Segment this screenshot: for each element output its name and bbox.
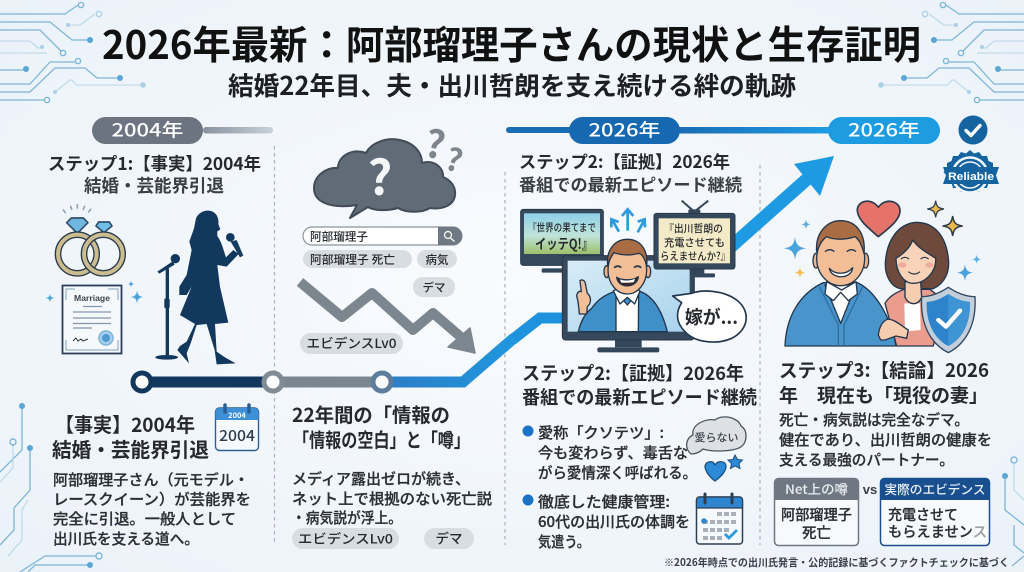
title: 2026年最新：阿部瑠理子さんの現状と生存証明 <box>102 15 921 71</box>
section 1 body: レースクイーン）が芸能界を <box>53 488 251 510</box>
comparison box: evidence: もらえませンス <box>888 521 987 542</box>
icon: check circle <box>958 116 988 144</box>
icon: question cloud: ? <box>421 113 450 170</box>
section 4 body <box>779 409 992 470</box>
comparison box: rumor <box>774 478 858 546</box>
search bar <box>303 227 462 245</box>
chip: 阿部瑠理子 死亡: 阿部瑠理子 死亡 <box>310 252 395 268</box>
step 2 heading top: ステップ2:【証拠】2026年 <box>519 148 730 173</box>
icon: 2004 calendar <box>216 405 258 450</box>
woman <box>885 222 949 346</box>
section 1 heading <box>52 409 209 463</box>
icon: question cloud <box>314 113 468 218</box>
TV right caption: らえませんか?』 <box>660 248 730 264</box>
bullet: health care <box>522 491 690 552</box>
woman hand <box>878 319 908 340</box>
shield <box>921 287 975 353</box>
section 4 heading <box>779 356 989 408</box>
chip: デマ: デマ <box>422 280 446 296</box>
TV right <box>654 201 735 277</box>
chip: エビデンスLv0 lower: エビデンスLv0 <box>298 528 393 548</box>
arrows above presenter <box>611 209 645 232</box>
comparison box: evidence: 充電させて <box>888 504 958 525</box>
TV left caption: イッテQ!』 <box>535 234 593 254</box>
chip: 病気: 病気 <box>426 252 449 268</box>
section 4 body: 健在であり、出川哲朗の健康を <box>779 429 992 450</box>
icon: question cloud: ? <box>441 134 468 181</box>
speech bubble <box>673 291 746 342</box>
icon: Reliable badge <box>943 150 999 194</box>
chip: デマ lower <box>424 528 474 549</box>
circuit decoration: bottom right <box>1002 457 1024 566</box>
section 1 body: 出川氏を支える道へ。 <box>53 528 199 549</box>
sparkles near certificate <box>46 280 144 304</box>
chip: デマ <box>413 277 455 297</box>
rising blue trend arrow <box>512 156 834 340</box>
step 2 heading top: 番組での最新エピソード継続 <box>519 171 742 196</box>
man <box>785 221 896 346</box>
step 2 heading top <box>519 148 742 196</box>
section 1 heading: 【事実】2004年 <box>55 409 195 438</box>
step 1 heading <box>48 151 261 198</box>
section dividers <box>274 146 760 545</box>
circuit decoration: top right <box>878 2 1024 103</box>
section 1 body: 完全に引退。一般人として <box>53 508 236 529</box>
timeline header: 2004 pill <box>92 116 273 144</box>
comparison box: evidence <box>880 478 990 546</box>
section 3 heading: ステップ2:【証拠】2026年 <box>522 360 744 386</box>
icon: singer silhouette <box>155 211 243 364</box>
TV right caption: 充電させても <box>664 235 725 250</box>
circuit decoration: top left <box>0 2 146 103</box>
icon: question cloud: ? <box>368 139 392 209</box>
icon: 2004 calendar: 2004 <box>219 425 255 446</box>
timeline header: 2026 light pill <box>828 116 940 144</box>
step 1 heading: 結婚・芸能界引退 <box>84 173 224 198</box>
icon: 愛らない bubble with heart and star <box>687 417 746 481</box>
bullet: health care: 気遣う。 <box>538 531 590 552</box>
timeline header: 2026 light pill: 2026年 <box>848 116 920 142</box>
section 3 heading <box>522 360 757 410</box>
subtitle: 結婚22年目、夫・出川哲朗を支え続ける絆の軌跡 <box>228 66 796 103</box>
comparison box: evidence: 実際のエビデンス <box>884 479 986 498</box>
section 2 heading: 「情報の空白」と「噂」 <box>293 424 470 453</box>
icon: care calendar <box>696 494 742 544</box>
timeline track <box>133 338 514 391</box>
section 2 body: メディア露出ゼロが続き、 <box>292 468 470 489</box>
bubble text: 嫁が... <box>685 304 738 330</box>
bullet: nickname <box>522 422 697 483</box>
comparison box: rumor: Net上の噂 <box>785 479 848 498</box>
sparkles <box>784 201 981 281</box>
icon: Reliable badge: Reliable <box>948 171 994 183</box>
bullet: nickname: 今も変わらず、毒舌な <box>538 442 688 463</box>
section 2 heading <box>292 399 470 453</box>
chip: 病気 <box>417 250 457 268</box>
section 4 heading: 年 現在も「現役の妻」 <box>779 381 988 408</box>
step 1 heading: ステップ1:【事実】2004年 <box>48 151 261 176</box>
icon: wedding rings <box>58 205 123 273</box>
section 2 body: ネット上で根拠のない死亡説 <box>292 488 492 509</box>
bullet: health care: 60代の出川氏の体調を <box>538 511 690 532</box>
section 2 body: ・病気説が浮上。 <box>292 507 402 528</box>
TV right caption <box>660 221 730 264</box>
section 2 body <box>292 468 492 528</box>
TV right caption: 『出川哲朗の <box>664 221 723 236</box>
section 1 heading: 結婚・芸能界引退 <box>52 434 209 463</box>
icon: 2004 calendar: 2004 <box>228 410 246 421</box>
TV main <box>562 256 694 352</box>
presenter <box>577 239 667 332</box>
bullet: health care: 徹底した健康管理: <box>538 491 670 512</box>
illustration: couple <box>784 201 981 353</box>
heart <box>857 201 900 237</box>
section 2 heading: 22年間の「情報の <box>292 399 450 428</box>
circuit decoration: bottom left <box>0 403 102 572</box>
TV left <box>521 209 603 273</box>
TV left caption <box>528 220 596 254</box>
section 1 body <box>53 469 251 549</box>
bullet: nickname: 愛称「クソテツ」: <box>538 422 664 443</box>
falling gray arrow <box>300 282 475 353</box>
timeline header: 2026 dark pill <box>506 116 830 144</box>
search bar: 阿部瑠理子 <box>310 228 369 244</box>
section 3 heading: 番組での最新エピソード継続 <box>522 384 757 410</box>
icon: marriage certificate <box>62 286 122 354</box>
icon: 愛らない bubble with heart and star: 愛らない <box>694 430 738 445</box>
timeline header: 2004 pill: 2004年 <box>112 116 184 142</box>
bullet: nickname: がら愛情深く呼ばれる。 <box>538 462 697 483</box>
comparison box: rumor: 死亡 <box>802 522 831 543</box>
illustration: TVs and presenter <box>521 201 746 352</box>
section 1 body: 阿部瑠理子さん（元モデル・ <box>53 469 249 490</box>
section 4 body: 支える最強のパートナー。 <box>779 449 954 470</box>
icon: marriage certificate: Marriage <box>74 293 110 303</box>
section 4 heading: ステップ3:【結論】2026 <box>779 356 989 383</box>
comparison box: rumor: 阿部瑠理子 <box>781 504 852 525</box>
chip: 阿部瑠理子 死亡 <box>303 250 412 268</box>
TV left caption: 『世界の果てまで <box>528 220 596 235</box>
chip: エビデンスLv0 upper: エビデンスLv0 <box>306 333 396 352</box>
timeline header: 2026 dark pill: 2026年 <box>588 116 660 142</box>
chip: デマ lower: デマ <box>436 528 462 548</box>
section 4 body: 死亡・病気説は完全なデマ。 <box>779 409 969 430</box>
footnote: ※2026年時点での出川氏発言・公的記録に基づくファクトチェックに基づく <box>664 555 1009 570</box>
vs label: vs <box>863 482 877 497</box>
